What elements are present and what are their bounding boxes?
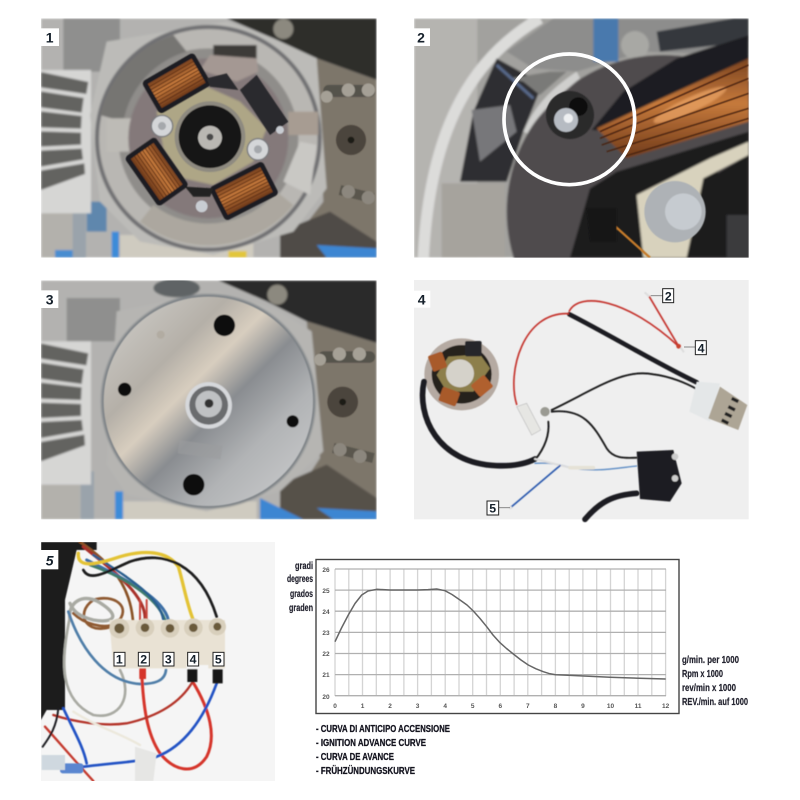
x axis ticks [333, 703, 670, 710]
x axis ticks: 5 [471, 703, 475, 710]
x axis ticks: 0 [333, 703, 337, 710]
terminal number 2 [138, 652, 149, 667]
photo 3 engine background [41, 279, 377, 519]
panel 2: close-up of timing screw [414, 18, 749, 258]
photo 2 wire and bolts [546, 65, 749, 258]
photo 4 connectors and CDI [509, 292, 747, 508]
badge 2 [414, 28, 430, 46]
ignition advance line chart [316, 560, 679, 714]
badge 1: 1 [46, 30, 54, 46]
badge 1 [41, 28, 59, 46]
x axis ticks: 10 [607, 703, 614, 710]
y axis ticks [322, 567, 330, 701]
y axis ticks: 21 [322, 672, 330, 679]
terminal number 1 [114, 652, 125, 667]
highlight circle [504, 54, 635, 185]
chart caption [316, 723, 450, 777]
y axis ticks: 22 [322, 651, 330, 658]
y axis ticks: 25 [322, 588, 330, 595]
photo 5 background [41, 542, 275, 781]
terminal number 4 [188, 652, 199, 667]
photo 1 coils and hub [124, 52, 375, 221]
y axis unit labels: degrees [287, 574, 313, 585]
x axis unit labels [682, 655, 748, 708]
y axis ticks: 20 [322, 694, 330, 701]
photo 4 wires [423, 297, 697, 519]
y axis unit labels: grados [290, 589, 313, 600]
x axis unit labels: rev/min x 1000 [682, 683, 736, 694]
photo 5 terminal block [42, 618, 226, 781]
chart caption: - CURVA DE AVANCE [316, 751, 394, 763]
x axis ticks: 6 [498, 703, 502, 710]
y axis unit labels: gradi [295, 561, 313, 572]
photo 1 engine background [41, 18, 377, 258]
terminal number 3 [163, 652, 174, 667]
x axis unit labels: g/min. per 1000 [682, 655, 739, 666]
chart frame [316, 560, 679, 714]
panel 4: wiring kit with labels [414, 280, 749, 519]
terminal number 5 [213, 652, 224, 667]
panel 5: terminal block wiring [41, 542, 275, 781]
terminal number 3: 3 [165, 653, 172, 667]
photo 4 background [414, 280, 749, 519]
label tag 2: 2 [665, 289, 672, 303]
label tag 4 [684, 341, 706, 355]
panel 1: stator mounted on engine [41, 18, 377, 258]
photo 3 flywheel disc [104, 297, 375, 506]
label tag 5: 5 [489, 502, 496, 516]
panel 3: flywheel mounted [41, 279, 377, 519]
x axis ticks: 9 [581, 703, 585, 710]
badge 3: 3 [46, 292, 54, 308]
label tag 2 [651, 289, 674, 303]
terminal number 1: 1 [116, 653, 123, 667]
advance curve [335, 589, 666, 679]
badge 4 [414, 291, 430, 308]
x axis ticks: 1 [361, 703, 365, 710]
photo 4 stator plate [424, 338, 499, 410]
y axis ticks: 24 [322, 609, 330, 616]
y axis unit labels: graden [289, 603, 313, 614]
badge 5 [41, 550, 58, 569]
chart caption: - IGNITION ADVANCE CURVE [316, 737, 426, 749]
y axis unit labels [287, 561, 313, 614]
terminal number 5: 5 [215, 653, 222, 667]
badge 2: 2 [417, 30, 425, 46]
badge 5: 5 [46, 552, 54, 568]
badge 3 [41, 290, 58, 308]
chart grid [335, 569, 666, 696]
chart caption: - FRÜHZÜNDUNGSKURVE [316, 764, 415, 777]
x axis unit labels: Rpm x 1000 [682, 669, 723, 680]
y axis ticks: 26 [322, 567, 330, 574]
x axis ticks: 7 [526, 703, 530, 710]
x axis ticks: 12 [662, 703, 670, 710]
photo 2 casing and stator [414, 18, 749, 258]
y axis ticks: 23 [322, 630, 330, 637]
chart caption: - CURVA DI ANTICIPO ACCENSIONE [316, 723, 450, 735]
label tag 5 [487, 501, 510, 516]
terminal number 4: 4 [190, 653, 197, 667]
x axis ticks: 3 [416, 703, 420, 710]
x axis ticks: 11 [635, 703, 642, 710]
x axis ticks: 4 [443, 703, 447, 710]
x axis ticks: 2 [388, 703, 392, 710]
terminal number 2: 2 [140, 653, 147, 667]
x axis unit labels: REV./min. auf 1000 [682, 697, 748, 708]
label tag 4: 4 [698, 341, 705, 355]
x axis ticks: 8 [554, 703, 558, 710]
badge 4: 4 [418, 292, 426, 308]
photo 5 wire loom [41, 542, 217, 781]
